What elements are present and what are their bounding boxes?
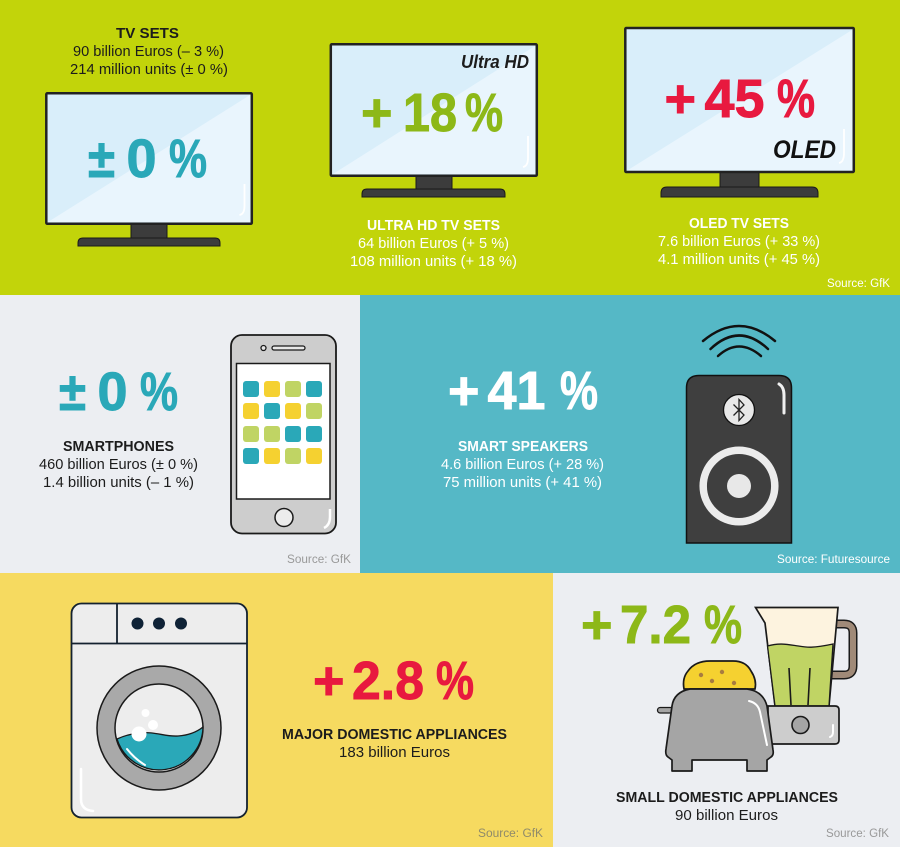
stat: TV sets change: % [169, 129, 207, 189]
stat: major domestic appliances change: % [436, 651, 474, 711]
text block: smart speakers: 4.6 billion Euros (+ 28 %) [441, 457, 604, 473]
stat: smart speakers change: 41 [488, 361, 546, 421]
stat: OLED change: 45 [704, 69, 764, 129]
stat: major domestic appliances change: 2.8 [352, 651, 424, 711]
panel: smart speakers background [360, 295, 900, 573]
text block: smartphones [39, 439, 198, 491]
stat: Ultra HD change: % [465, 83, 503, 143]
stat: smart speakers change [448, 361, 598, 421]
panel: major domestic appliances background [0, 573, 553, 847]
stat: small domestic appliances change: 7.2 [620, 595, 691, 655]
source: smartphones: Source: GfK [287, 554, 351, 566]
stat: TV sets change: 0 [126, 129, 157, 189]
stat: Ultra HD change: + [361, 83, 393, 143]
stat: small domestic appliances change: + [581, 595, 613, 655]
text block: small domestic appliances: SMALL DOMESTIC APPLIANCES [616, 790, 838, 806]
stat: Ultra HD change: 18 [403, 83, 457, 143]
icon: wireless waves [703, 326, 775, 356]
text block: Ultra HD TV sets: 64 billion Euros (+ 5 %) [358, 236, 509, 252]
icon: TV set [46, 93, 252, 246]
stat: OLED change [664, 69, 815, 129]
panel: television backgrounds [0, 0, 900, 295]
text block: smartphones: SMARTPHONES [63, 439, 174, 455]
icon: blender [756, 608, 853, 744]
icon: Ultra HD TV set [331, 44, 537, 197]
stat: small domestic appliances change: % [704, 595, 742, 655]
stat: smart speakers change: + [448, 361, 480, 421]
stat: TV sets change [88, 129, 207, 189]
source: TV sets: Source: GfK [827, 278, 890, 290]
text block: OLED TV sets [658, 216, 820, 268]
source: small domestic appliances: Source: GfK [826, 828, 889, 840]
stat: OLED change: + [664, 69, 696, 129]
label: Ultra HD: Ultra HD [461, 52, 529, 72]
stat: major domestic appliances change [313, 651, 474, 711]
source: smart speakers: Source: Futuresource [777, 554, 890, 566]
stat: small domestic appliances change [581, 595, 742, 655]
stat: Ultra HD change [361, 83, 503, 143]
text block: OLED TV sets: 4.1 million units (+ 45 %) [658, 252, 820, 268]
panel: small domestic appliances background [553, 573, 900, 847]
stat: OLED change: % [777, 69, 815, 129]
icon: smartphone [231, 335, 336, 534]
text block: smart speakers: SMART SPEAKERS [458, 439, 588, 455]
text block: OLED TV sets: 7.6 billion Euros (+ 33 %) [658, 234, 820, 250]
text block: Ultra HD TV sets: 108 million units (+ 18 %) [350, 254, 517, 270]
icon: OLED TV set [625, 28, 854, 197]
text block: small domestic appliances [616, 790, 838, 824]
text block: smartphones: 1.4 billion units (– 1 %) [43, 475, 194, 491]
stat: smartphones change [59, 362, 178, 422]
text block: major domestic appliances: MAJOR DOMESTIC APPLIANCES [282, 727, 507, 743]
panel: smartphones background [0, 295, 360, 573]
text block: TV sets [70, 26, 228, 78]
stat: smartphones change: % [140, 362, 178, 422]
icon: smart speaker [686, 376, 792, 543]
stat: smartphones change: ± [59, 362, 86, 422]
text block: TV sets: 214 million units (± 0 %) [70, 62, 228, 78]
label: OLED: OLED [773, 136, 836, 164]
icon: toaster [658, 661, 773, 771]
icon: washing machine [72, 604, 247, 818]
text block: major domestic appliances [282, 727, 507, 761]
stat: major domestic appliances change: + [313, 651, 345, 711]
text block: smart speakers: 75 million units (+ 41 %) [443, 475, 602, 491]
stat: smartphones change: 0 [98, 362, 128, 422]
text block: TV sets: 90 billion Euros (– 3 %) [73, 44, 224, 60]
text block: OLED TV sets: OLED TV SETS [689, 216, 789, 232]
stat: smart speakers change: % [560, 361, 598, 421]
stat: TV sets change: ± [88, 129, 115, 189]
text block: Ultra HD TV sets: ULTRA HD TV SETS [367, 218, 500, 234]
text block: small domestic appliances: 90 billion Euros [675, 808, 778, 824]
text block: TV sets: TV SETS [116, 26, 179, 42]
text block: smartphones: 460 billion Euros (± 0 %) [39, 457, 198, 473]
text block: smart speakers [441, 439, 604, 491]
text block: major domestic appliances: 183 billion Euros [339, 745, 450, 761]
text block: Ultra HD TV sets [350, 218, 517, 270]
source: major domestic appliances: Source: GfK [478, 828, 543, 840]
